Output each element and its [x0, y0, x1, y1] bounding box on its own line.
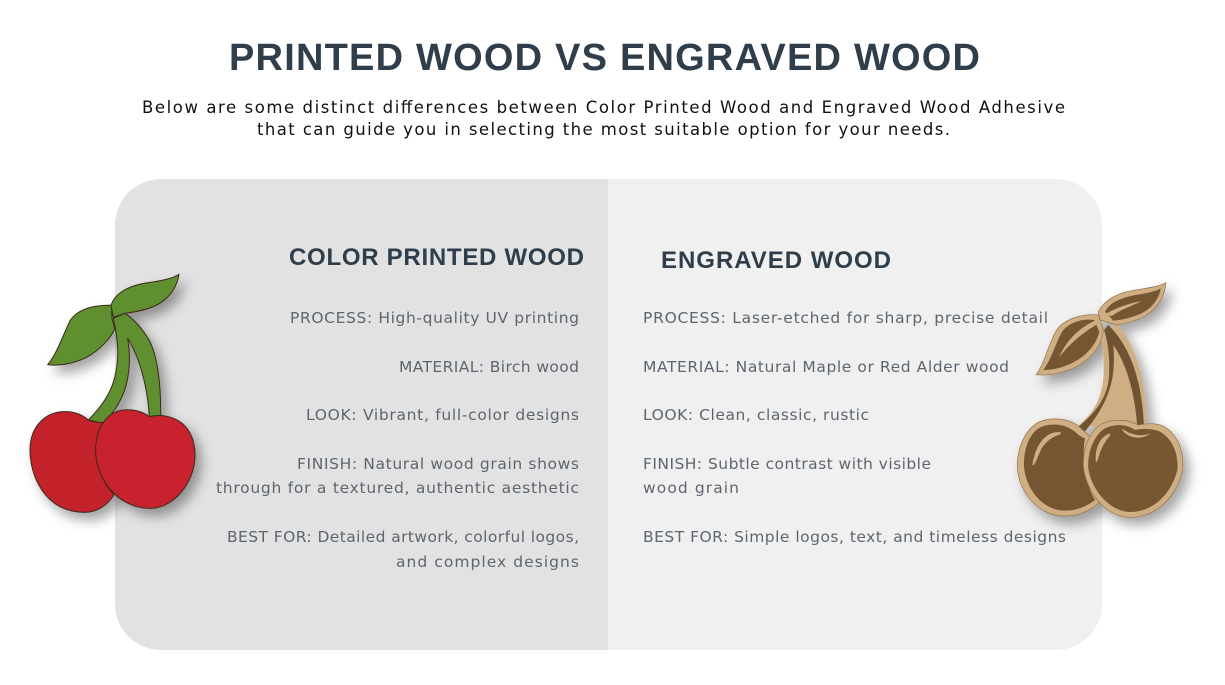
icon: engraved wood cherry [1017, 283, 1183, 517]
right cherry base [1083, 420, 1183, 517]
right cherry engraving [1088, 425, 1178, 512]
material text: MATERIAL: Birch wood [399, 358, 579, 376]
panel: color printed wood [216, 244, 584, 571]
finish text [216, 455, 579, 497]
stem engraving [1077, 325, 1144, 433]
stems [88, 313, 161, 423]
heading: engraved wood: ENGRAVED WOOD [661, 247, 891, 274]
finish text: wood grain [643, 479, 739, 497]
process text: PROCESS: High-quality UV printing [290, 309, 579, 327]
comparison panel [115, 179, 1102, 650]
subtitle: Below are some distinct differences between Color Printed Wood and Engraved Wood Adhesive [142, 98, 1065, 117]
stem base [1077, 323, 1147, 427]
right leaf engraving [1105, 289, 1161, 321]
right cherry side highlight [1096, 433, 1110, 463]
finish text: FINISH: Subtle contrast with visible [643, 455, 931, 473]
subtitle: that can guide you in selecting the most suitable option for your needs. [257, 120, 950, 139]
best for text: BEST FOR: Detailed artwork, colorful logos, [227, 528, 579, 546]
left leaf base [1036, 315, 1103, 375]
left leaf vein [1059, 320, 1102, 357]
left leaf [48, 305, 115, 365]
finish text [643, 455, 931, 497]
subtitle [142, 98, 1065, 139]
best for text [227, 528, 579, 571]
right cherry [96, 410, 195, 508]
right leaf vein [1103, 301, 1142, 316]
finish text: through for a textured, authentic aesthetic [216, 479, 579, 497]
finish text: FINISH: Natural wood grain shows [297, 455, 579, 473]
left cherry engraving [1024, 424, 1095, 511]
right cherry top highlight [1122, 428, 1151, 438]
panel: engraved wood [643, 247, 1066, 546]
material text: MATERIAL: Natural Maple or Red Alder wood [643, 358, 1009, 376]
icon: red and green printed cherry [30, 274, 195, 512]
left cherry highlight [1032, 432, 1061, 465]
title: PRINTED WOOD VS ENGRAVED WOOD [229, 37, 980, 79]
right leaf [111, 274, 179, 317]
left cherry base [1017, 419, 1100, 516]
look text: LOOK: Clean, classic, rustic [643, 406, 869, 424]
process text: PROCESS: Laser-etched for sharp, precise detail [643, 309, 1048, 327]
heading: color printed wood: COLOR PRINTED WOOD [289, 244, 584, 271]
left cherry [30, 412, 114, 512]
left leaf engraving [1043, 320, 1099, 370]
best for text: BEST FOR: Simple logos, text, and timeless designs [643, 528, 1066, 546]
best for text: and complex designs [396, 553, 579, 571]
look text: LOOK: Vibrant, full-color designs [306, 406, 579, 424]
right leaf base [1098, 283, 1166, 325]
